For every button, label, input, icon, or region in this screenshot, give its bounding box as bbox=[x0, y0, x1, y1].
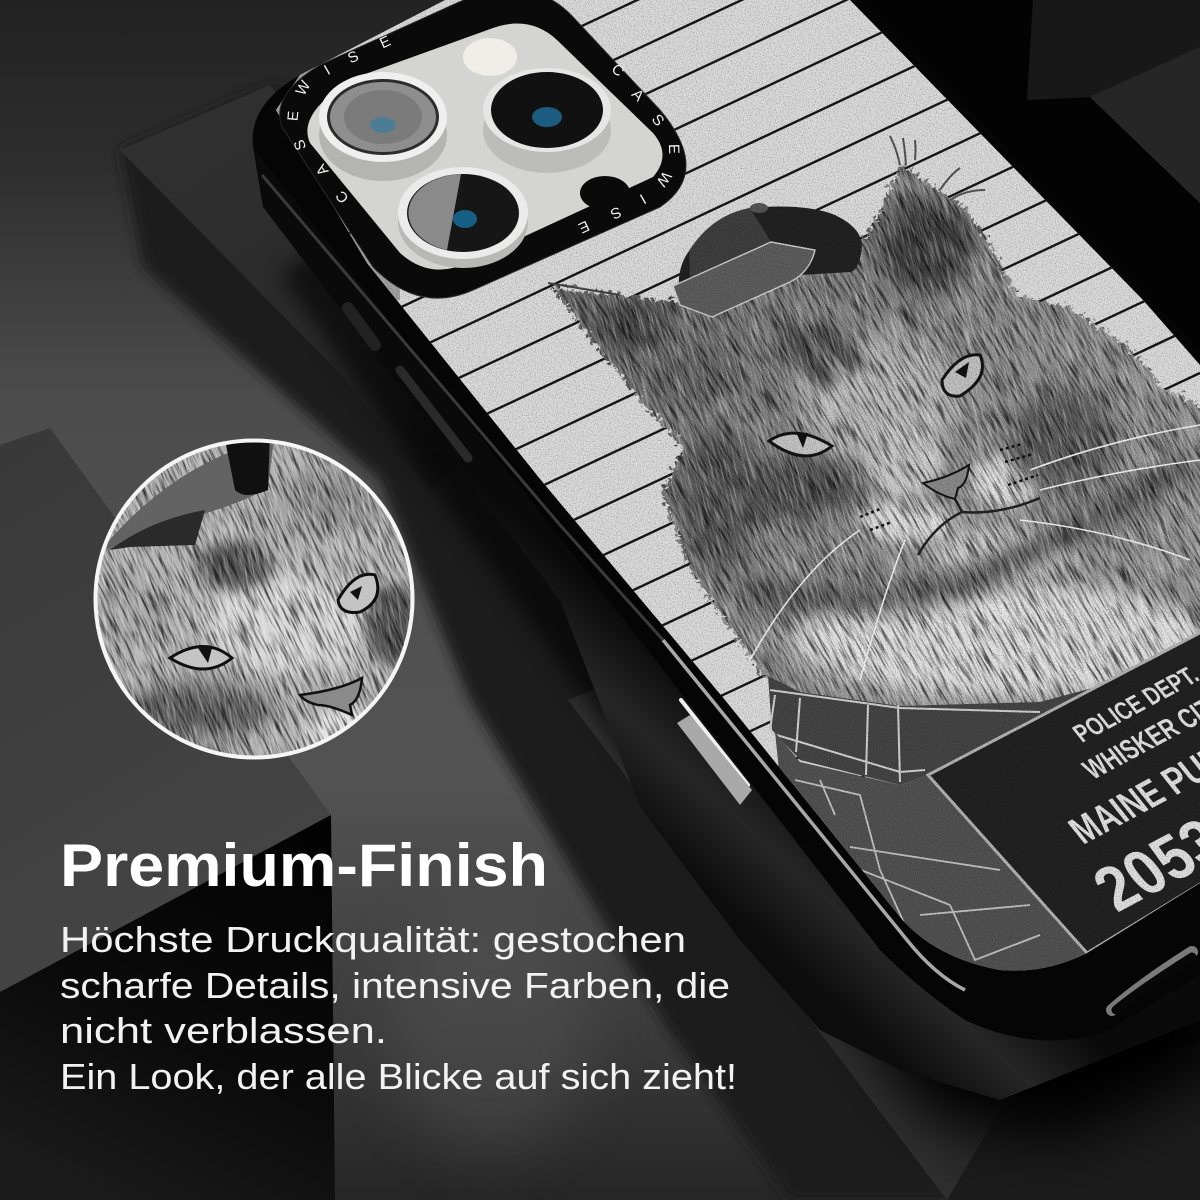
camera bump ring bbox=[280, 0, 686, 298]
ring brand text: S bbox=[648, 111, 667, 130]
body text: Ein Look, der alle Blicke auf sich zieht! bbox=[60, 1056, 737, 1097]
chest light bbox=[790, 582, 1200, 698]
mouth bbox=[918, 498, 1040, 555]
cap bbox=[673, 203, 862, 317]
ring brand text: C bbox=[608, 61, 628, 80]
lit floor glow bbox=[390, 910, 590, 1150]
ring brand text: W bbox=[293, 77, 315, 99]
phone bottom shadow bbox=[780, 900, 1200, 1140]
cheek darks bbox=[740, 458, 860, 522]
print grain bbox=[260, 0, 1200, 980]
lens: tele bbox=[398, 167, 528, 268]
body text: scharfe Details, intensive Farben, die bbox=[60, 965, 730, 1006]
body text: nicht verblassen. bbox=[60, 1010, 387, 1051]
ring brand text: W bbox=[652, 168, 675, 190]
top right background bbox=[1027, 0, 1200, 100]
back print bbox=[276, 0, 1200, 971]
ring brand text: S bbox=[291, 137, 310, 152]
muzzle lights bbox=[969, 454, 1041, 506]
body text bbox=[60, 919, 737, 1097]
ring brand text: A bbox=[628, 86, 647, 105]
detail magnifier circle bbox=[94, 438, 414, 760]
magnified face tones bbox=[100, 470, 425, 761]
ring brand text: E bbox=[576, 217, 592, 236]
lower left block top bbox=[0, 428, 331, 992]
floor strip near phone bbox=[568, 620, 1200, 1200]
left tuft bbox=[548, 283, 620, 295]
magnified fur texture bbox=[98, 444, 410, 756]
ring brand text: E bbox=[665, 144, 682, 154]
ring brand text: S bbox=[608, 203, 624, 222]
sweater bbox=[775, 732, 1087, 980]
forehead bbox=[800, 338, 960, 462]
body text: Höchste Druckqualität: gestochen bbox=[60, 919, 686, 960]
magnified right eye bbox=[338, 574, 378, 612]
ear and temple darks bbox=[877, 197, 973, 293]
magnified cap bbox=[107, 442, 274, 550]
lens: wide bbox=[319, 72, 447, 181]
forehead stripes bbox=[785, 325, 860, 385]
ring brand text bbox=[285, 33, 682, 236]
phone case frame bbox=[253, 0, 1200, 1040]
ring brand text: E bbox=[285, 110, 302, 122]
charging port bbox=[1112, 952, 1192, 1010]
phone side wall bbox=[253, 147, 1200, 1100]
ring brand text: C bbox=[332, 187, 352, 206]
left eye bbox=[769, 432, 832, 456]
neck dark arc bbox=[740, 465, 1190, 599]
case glossy edge bbox=[663, 640, 965, 990]
top right block surface bbox=[1090, 47, 1200, 203]
floor bottom right bbox=[947, 1040, 1200, 1200]
plaque text bbox=[1067, 666, 1200, 912]
lens: main bbox=[483, 68, 611, 173]
slab top surface bbox=[120, 85, 520, 490]
scarf bbox=[768, 676, 1100, 785]
cat ear tufts bbox=[890, 136, 985, 200]
ring brand text: I bbox=[321, 62, 333, 79]
mugshot stripes bbox=[348, 0, 1200, 804]
ring brand text: E bbox=[377, 33, 393, 52]
flash bbox=[463, 38, 517, 76]
left strip shade near ring bbox=[276, 60, 400, 300]
cat illustration bbox=[548, 136, 1200, 970]
name plaque bbox=[928, 625, 1200, 953]
whiskers bbox=[750, 425, 1200, 680]
cat head and ruff bbox=[550, 158, 1200, 776]
phone left shadow bbox=[300, 260, 660, 760]
cat fur shading bbox=[94, 20, 1200, 970]
top right black face bbox=[860, 0, 1200, 420]
ring brand text: I bbox=[637, 190, 649, 207]
whisker dots bbox=[860, 444, 1038, 530]
phone bbox=[252, 0, 1200, 1100]
case upper gloss bbox=[262, 175, 663, 640]
lower left block face bbox=[0, 815, 335, 1200]
nose bbox=[923, 465, 969, 499]
camera glass bbox=[307, 24, 662, 270]
lidar sensor bbox=[580, 176, 630, 210]
ring brand text: S bbox=[345, 48, 361, 67]
side buttons bbox=[348, 308, 752, 805]
right eye bbox=[942, 355, 982, 396]
ring brand text: A bbox=[313, 161, 332, 179]
magnified nose bbox=[300, 678, 362, 715]
magnified left eye bbox=[170, 646, 232, 669]
title: Premium-Finish bbox=[60, 832, 548, 899]
